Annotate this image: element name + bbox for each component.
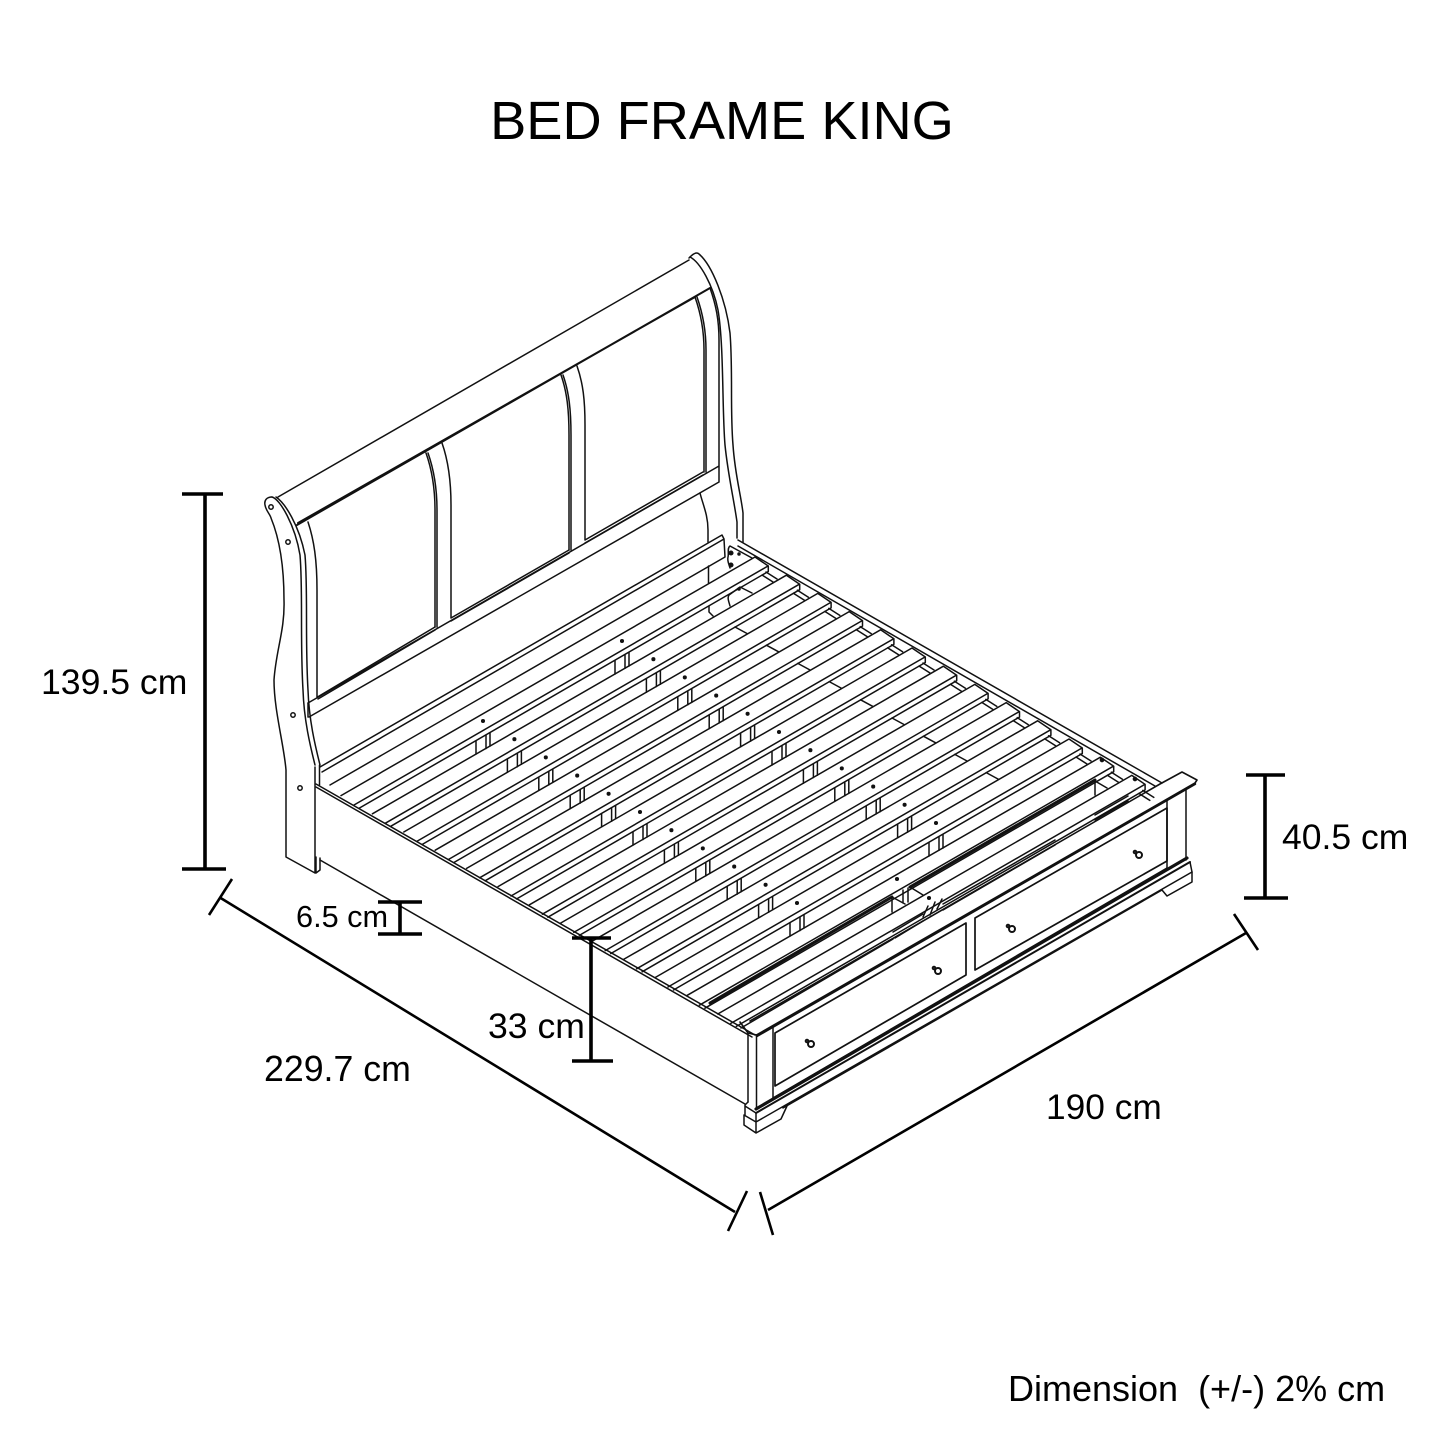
drawer knobs	[806, 851, 1142, 1047]
title: BED FRAME KING	[490, 91, 954, 151]
rear slat	[320, 535, 725, 785]
base moulding and feet	[756, 858, 1187, 1109]
headboard	[265, 253, 743, 873]
tolerance note: Dimension (+/-) 2% cm	[1008, 1368, 1385, 1409]
bed frame line drawing	[265, 253, 1197, 1133]
side rail near	[316, 784, 755, 1104]
under-slat drawer opening	[710, 780, 1128, 1028]
drawer fronts	[773, 808, 1167, 1098]
footboard	[740, 772, 1197, 1133]
dimension: height 40.5 cm: 40.5 cm	[1282, 817, 1408, 857]
dimension: height 40.5 cm	[1244, 775, 1408, 898]
screw holes	[269, 505, 302, 790]
dimension: height 139.5 cm	[41, 494, 226, 869]
dimension: length 229.7 cm	[209, 879, 747, 1231]
dimension: 33 cm	[488, 938, 613, 1061]
dimension: length 229.7 cm: 229.7 cm	[264, 1049, 411, 1089]
dimension: width 190 cm: 190 cm	[1046, 1088, 1162, 1127]
dimension: 6.5 cm: 6.5 cm	[296, 899, 388, 934]
dimension: height 139.5 cm: 139.5 cm	[41, 662, 187, 702]
side rail far	[738, 540, 1162, 786]
mounting brackets	[728, 546, 752, 606]
dimension: width 190 cm	[760, 914, 1258, 1235]
dimension: 33 cm: 33 cm	[488, 1006, 585, 1046]
bed slats	[341, 557, 1154, 1026]
